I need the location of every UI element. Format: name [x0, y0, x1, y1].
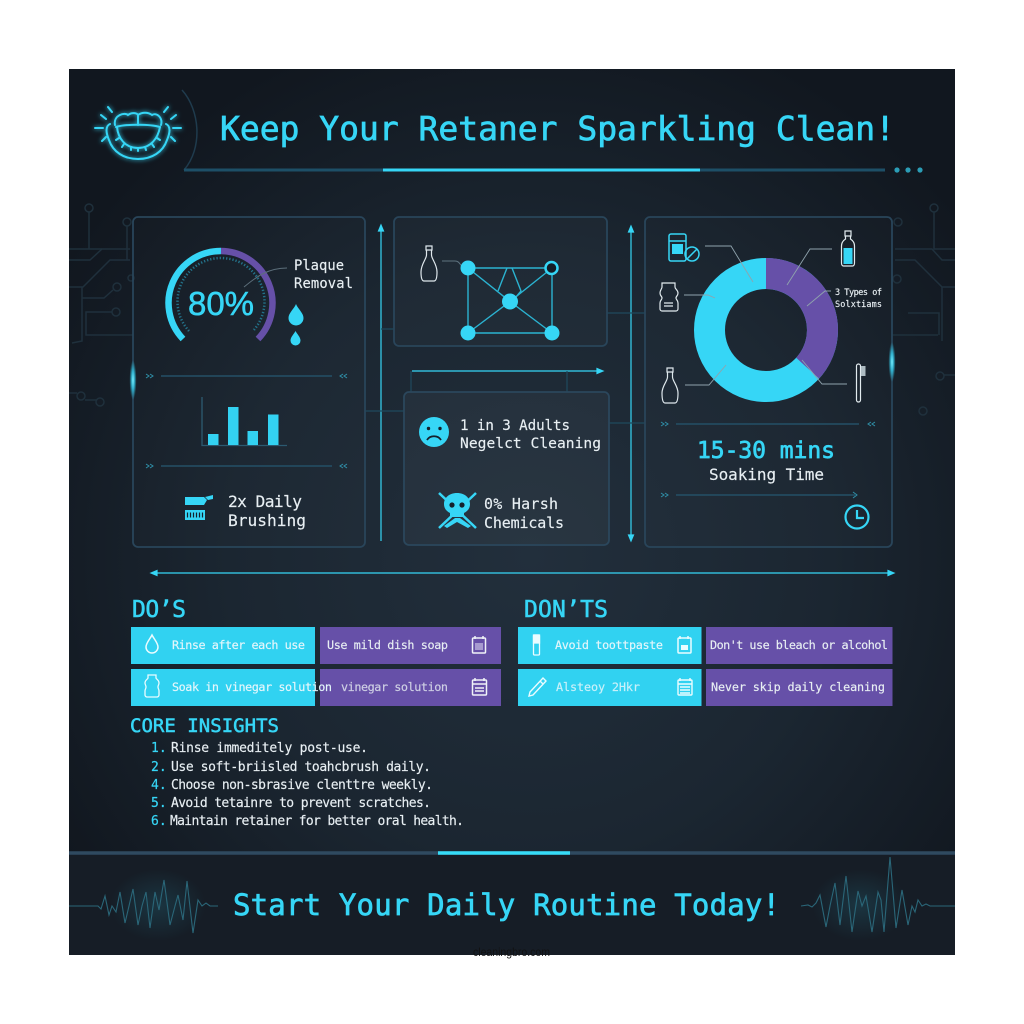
icon: calendar [678, 636, 691, 653]
panel: left stats [133, 217, 365, 547]
heading: core insights: CORE INSIGHTS [130, 715, 279, 737]
text: adults neglect: 1 in 3 Adults [460, 418, 570, 434]
card: dish soap [320, 627, 501, 664]
icon: calendar [678, 678, 692, 695]
card: abrasive: Alsteoy 2Hkr [556, 680, 640, 694]
divider [146, 374, 347, 378]
insights list: 4. [151, 778, 167, 793]
insights list [151, 741, 464, 829]
icon: calendar [472, 678, 486, 695]
card: never skip [706, 669, 892, 706]
card: vinegar purple: vinegar solution [341, 680, 448, 694]
metric: soak time: 15-30 mins [697, 438, 835, 464]
card: rinse: Rinse after each use [172, 638, 305, 652]
insights list: 6. [151, 814, 167, 829]
connector arrows [151, 225, 894, 576]
label: types of solutions [835, 288, 882, 310]
heading: do's: DO’S [132, 597, 186, 623]
circuit decoration right [892, 204, 955, 415]
card: bleach: Don't use bleach or alcohol [710, 638, 888, 652]
icon: retainer [95, 107, 181, 159]
icon: toothbrush [185, 495, 213, 520]
text: harsh chemicals: 0% Harsh [484, 495, 558, 513]
background panel [69, 69, 955, 955]
right waveform [801, 857, 955, 941]
icon: bottle [421, 246, 437, 281]
insights list: 1. [151, 741, 167, 756]
text: daily brushing: Brushing [228, 511, 306, 530]
label: plaque removal: Removal [294, 276, 353, 292]
text: soak in vinegar solution: Soak in vinegar solution [172, 680, 332, 694]
heading: don'ts: DON’TS [524, 597, 608, 623]
watermark: cleaningbro.com [473, 945, 550, 959]
label: types of solutions: Solxtiams [835, 300, 882, 310]
panel: network [394, 217, 607, 346]
card: never skip: Never skip daily cleaning [711, 680, 885, 694]
footer band [69, 853, 955, 955]
footer call to action: Start Your Daily Routine Today! [233, 888, 780, 922]
icon: bottle lower [662, 368, 678, 403]
bar chart [202, 397, 287, 446]
insights list: 2. [151, 760, 167, 775]
text: daily brushing [228, 492, 306, 530]
card: avoid toothpaste [518, 627, 702, 664]
icon: clock [846, 506, 868, 528]
text: adults neglect [460, 418, 601, 452]
card: abrasive [518, 669, 702, 706]
card: bleach [706, 627, 892, 664]
insights list: Use soft-briisled toahcbrush daily. [171, 760, 431, 775]
icon: jar [660, 283, 678, 311]
donut chart [710, 274, 822, 386]
icon: skull and crossbones [439, 493, 476, 528]
insights list: Avoid tetainre to prevent scratches. [171, 796, 431, 811]
icon: container with no sign [669, 234, 699, 261]
insights list: 5. [151, 796, 167, 811]
metric: soak time [697, 438, 835, 484]
label: plaque removal [294, 258, 353, 292]
side glow markers [130, 342, 896, 400]
gauge: 80% [169, 251, 287, 339]
header [95, 90, 923, 173]
divider [661, 422, 875, 426]
network diagram [442, 260, 560, 340]
card: dish soap: Use mild dish soap [327, 638, 448, 652]
left waveform [69, 869, 218, 941]
icon: drop [146, 635, 158, 653]
header dots [894, 167, 923, 173]
leader lines [684, 246, 847, 385]
label: plaque removal: Plaque [294, 258, 344, 274]
icon: toothbrush upright [856, 364, 866, 402]
insights list: Choose non-sbrasive clenttre weekly. [171, 778, 433, 793]
icon: calendar [472, 636, 486, 653]
metric: soak time: Soaking Time [709, 465, 824, 484]
card: rinse [131, 627, 315, 664]
card: soak vinegar [131, 669, 315, 706]
icon: pencil [529, 678, 546, 696]
text: harsh chemicals: Chemicals [484, 514, 564, 532]
text: adults neglect: Negelct Cleaning [460, 435, 601, 452]
card: vinegar purple [320, 669, 501, 706]
gauge: 80%: 80% [188, 285, 254, 322]
circuit decoration left [69, 204, 134, 406]
divider with arrow [661, 492, 857, 498]
card: avoid toothpaste: Avoid toottpaste [555, 638, 663, 652]
icon: jar [145, 675, 159, 697]
header rule [184, 168, 885, 172]
insights list: Rinse immeditely post-use. [171, 741, 368, 756]
label: types of solutions: 3 Types of [835, 288, 882, 298]
icon: water drops [288, 304, 304, 346]
icon: bottle blue [842, 231, 854, 266]
divider [146, 464, 347, 468]
icon: tube [534, 635, 540, 655]
text: harsh chemicals [484, 495, 564, 532]
panel: soaking [645, 217, 892, 547]
header arc [182, 90, 197, 170]
icon: sad face [419, 417, 449, 447]
title: Keep Your Retaner Sparkling Clean! [220, 109, 895, 148]
text: daily brushing: 2x Daily [228, 492, 302, 511]
insights list: Maintain retainer for better oral health. [170, 814, 464, 829]
panel: statistics [404, 392, 609, 545]
